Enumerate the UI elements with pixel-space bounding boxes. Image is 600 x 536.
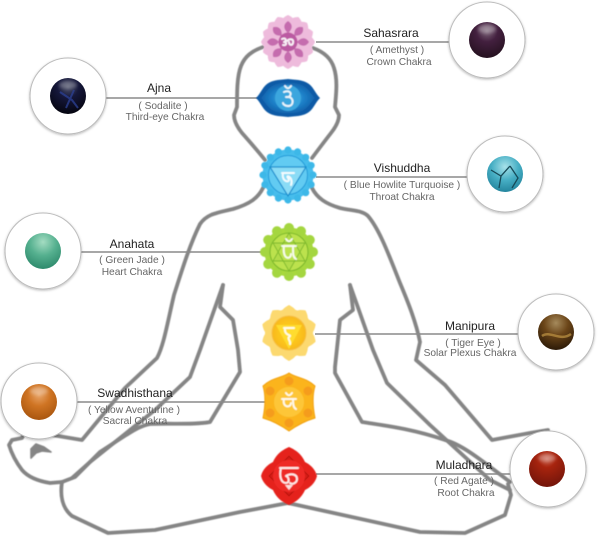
label: Sahasrara: Crown Chakra <box>366 57 432 68</box>
label: Manipura: Manipura <box>445 319 495 333</box>
chakra: Swadhisthana <box>263 373 315 431</box>
label: Sahasrara <box>363 26 432 68</box>
label: Anahata: ( Green Jade ) <box>99 255 165 266</box>
stone: Red Agate <box>510 431 586 507</box>
label: Vishuddha <box>344 161 460 203</box>
chakra: Manipura <box>260 305 318 361</box>
label: Ajna: ( Sodalite ) <box>138 101 188 112</box>
label: Swadhisthana: Sacral Chakra <box>103 416 168 427</box>
connector lines <box>75 42 520 474</box>
label: Muladhara: ( Red Agate ) <box>434 476 494 487</box>
label: Ajna: Ajna <box>147 81 171 95</box>
label: Anahata <box>99 237 165 278</box>
stone: Green Jade <box>5 213 81 289</box>
stone: Blue Howlite Turquoise <box>467 136 543 212</box>
label: Sahasrara: Sahasrara <box>363 26 419 40</box>
label: Manipura: Solar Plexus Chakra <box>424 348 517 359</box>
label: Ajna <box>126 81 205 123</box>
stone: Tiger Eye <box>518 294 594 370</box>
chakra: Vishuddha <box>259 146 317 204</box>
chakra: Muladhara <box>261 447 317 505</box>
label: Anahata: Anahata <box>110 237 155 251</box>
stone: Amethyst <box>449 2 525 78</box>
stone: Sodalite <box>30 58 106 134</box>
chakra: Ajna <box>256 79 320 117</box>
label: Manipura: ( Tiger Eye ) <box>445 338 501 349</box>
label: Vishuddha: Throat Chakra <box>369 192 435 203</box>
label: Swadhisthana <box>88 386 180 427</box>
label: Sahasrara: ( Amethyst ) <box>370 45 424 56</box>
chakra: Sahasrara <box>261 15 315 69</box>
label: Swadhisthana: ( Yellow Aventurine ) <box>88 405 180 416</box>
label: Vishuddha: Vishuddha <box>374 161 431 175</box>
label: Anahata: Heart Chakra <box>102 267 163 278</box>
chakra: Anahata <box>260 223 318 281</box>
stone: Yellow Aventurine <box>1 363 77 439</box>
label: Swadhisthana: Swadhisthana <box>97 386 173 400</box>
label: Muladhara <box>434 458 495 499</box>
label: Muladhara: Root Chakra <box>437 488 495 499</box>
label: Ajna: Third-eye Chakra <box>126 112 205 123</box>
label: Manipura <box>424 319 517 359</box>
label: Vishuddha: ( Blue Howlite Turquoise ) <box>344 180 460 191</box>
label: Muladhara: Muladhara <box>436 458 493 472</box>
